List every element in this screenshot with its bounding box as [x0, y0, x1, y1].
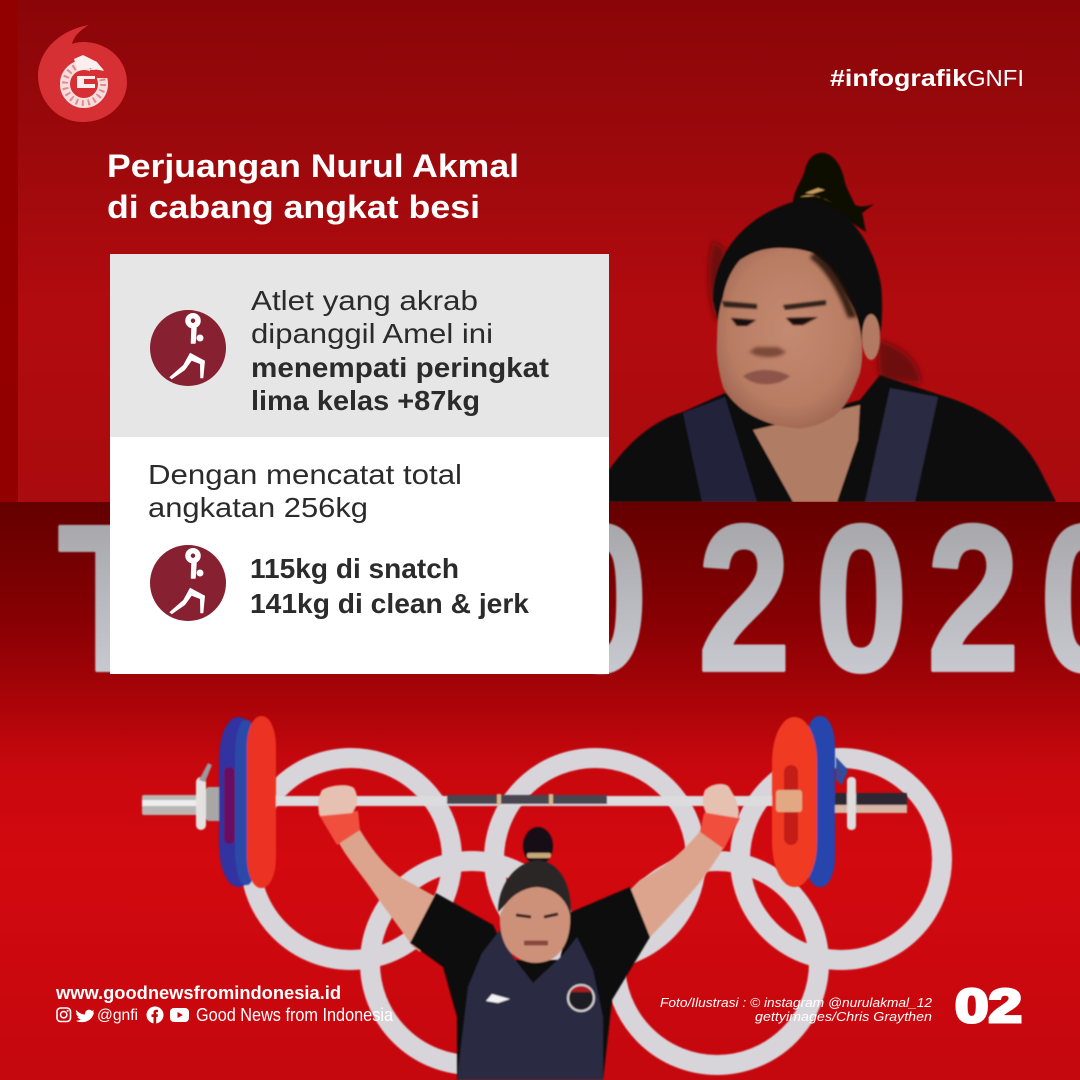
- left hand: [318, 785, 357, 816]
- title: di cabang angkat besi: [107, 189, 480, 225]
- logo swoosh: [486, 994, 510, 1003]
- lips: [743, 370, 790, 384]
- hair bun: [523, 827, 553, 865]
- neck: [753, 405, 860, 502]
- photo: Olympic rings: [250, 758, 942, 1065]
- hair strands on temple: [810, 253, 857, 318]
- text: lift results: [250, 553, 529, 619]
- text: ranking: dipanggil Amel ini: [251, 318, 493, 349]
- photo credit: Foto/Ilustrasi : © instagram @nurulakmal_12: [660, 995, 933, 1010]
- hair tie: [800, 188, 833, 203]
- nose: [749, 347, 786, 357]
- icon: twitter: [76, 1010, 94, 1022]
- text: ranking: Atlet yang akrab: [251, 285, 478, 316]
- ear: [862, 314, 880, 360]
- right hand: [703, 784, 739, 818]
- right strap: [865, 388, 938, 502]
- icon: facebook: [146, 1006, 164, 1024]
- eyebrows: [722, 300, 826, 310]
- icon: weightlifting second: [150, 545, 226, 621]
- title: Perjuangan Nurul Akmal: [107, 148, 519, 184]
- text: ranking: lima kelas +87kg: [251, 385, 480, 416]
- face: [500, 887, 570, 963]
- bar: [270, 796, 780, 806]
- text: total lift: angkatan 256kg: [148, 492, 368, 523]
- text: total lift: [148, 459, 462, 523]
- loose hair glow: [709, 240, 921, 384]
- mouth: [524, 940, 548, 946]
- icon: instagram: [57, 1008, 70, 1022]
- hashtag: GNFI: [967, 65, 1024, 91]
- page number: 02: [955, 979, 1022, 1032]
- left red plate: [247, 716, 276, 888]
- footer social row: [57, 1005, 394, 1025]
- photo: weightlifter: [318, 784, 740, 1080]
- photo: TOKYO 2020 signage: [57, 522, 1080, 675]
- brand name: Good News from Indonesia: [196, 1005, 394, 1025]
- black shirt: [410, 887, 650, 1080]
- photo: TOKYO 2020 signage: 2: [698, 481, 791, 714]
- photo credit: gettyimages/Chris Graythen: [755, 1009, 932, 1024]
- photo: barbell: [142, 716, 907, 888]
- hair: [498, 860, 571, 915]
- left collar: [196, 777, 206, 830]
- photo: TOKYO 2020 signage: 0: [815, 481, 908, 714]
- text: lift results: 115kg di snatch: [250, 553, 459, 584]
- left wrist wrap: [318, 811, 360, 845]
- photo: TOKYO 2020 signage: 0: [555, 481, 648, 714]
- logo emblem: [65, 55, 108, 103]
- panel: ranking section: [110, 254, 609, 437]
- face: [717, 248, 862, 428]
- hair cap: [713, 200, 882, 350]
- singlet: [457, 930, 603, 1080]
- photo: TOKYO 2020 signage: T: [58, 481, 160, 714]
- right collar: [847, 777, 856, 830]
- left strap: [683, 397, 757, 502]
- text: lift results: 141kg di clean & jerk: [250, 588, 529, 619]
- photo: Nurul Akmal portrait: [609, 153, 1056, 502]
- left arm: [339, 830, 436, 952]
- photo credit: [660, 995, 933, 1024]
- text: ranking: [251, 285, 549, 416]
- text: total lift: Dengan mencatat total: [148, 459, 462, 490]
- badge: [568, 985, 594, 1011]
- eyes: [516, 914, 558, 917]
- upper background panel: [0, 0, 1080, 502]
- left blue plate: [219, 717, 258, 887]
- bun: [793, 153, 874, 232]
- hashtag: [830, 65, 1024, 91]
- black shirt: [609, 375, 1056, 502]
- right blue plate: [805, 716, 835, 887]
- right red plate: [772, 717, 817, 887]
- right arm: [630, 830, 724, 948]
- text: ranking: menempati peringkat: [251, 352, 549, 383]
- icon: youtube: [170, 1008, 189, 1022]
- left sleeve: [142, 795, 198, 815]
- icon: weightlifting: [150, 310, 226, 386]
- lower background panel: [0, 502, 1080, 1080]
- right sleeve: [835, 793, 907, 813]
- logo: GNFI: [38, 25, 127, 122]
- handle: @gnfi: [97, 1007, 138, 1024]
- title: [107, 148, 519, 225]
- photo: TOKYO 2020 signage: 2: [927, 481, 1020, 714]
- right wrist wrap: [700, 813, 740, 849]
- eyes: [731, 317, 818, 326]
- panel: info card: [110, 254, 609, 674]
- hashtag: #infografik: [830, 65, 967, 91]
- footer website: www.goodnewsfromindonesia.id: [55, 982, 341, 1003]
